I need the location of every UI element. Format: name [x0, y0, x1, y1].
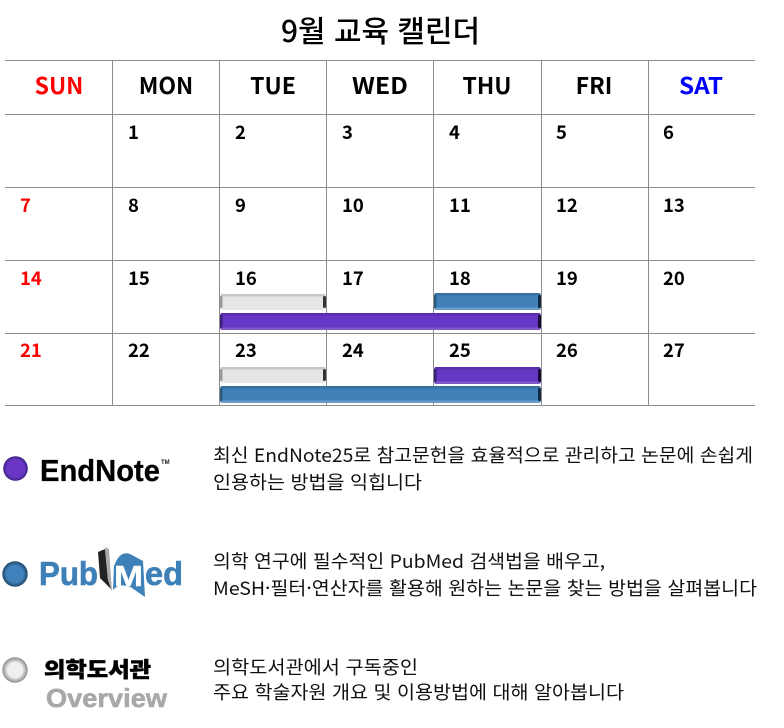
weekday header: TUE: [250, 67, 296, 101]
logo: library overview: 의학도서관: [44, 654, 151, 684]
date numbers: 7: [20, 192, 31, 218]
weekday header: WED: [352, 67, 408, 101]
date numbers: 13: [663, 192, 685, 218]
logo: PubMed: [39, 547, 183, 597]
date numbers: 24: [342, 337, 364, 363]
text: library description: 주요 학술자원 개요 및 이용방법에 대해 알아봅니다: [213, 679, 624, 705]
text: PubMed description: MeSH·필터·연산자를 활용해 원하는 논문을 찾는 방법을 살펴봅니다: [213, 575, 757, 601]
date numbers: 25: [449, 337, 471, 363]
date numbers: 16: [235, 265, 257, 291]
date numbers: 8: [128, 192, 139, 218]
logo: PubMed: Pub: [39, 555, 98, 592]
weekday header: FRI: [576, 67, 612, 101]
date numbers: 12: [556, 192, 578, 218]
logo: PubMed: M: [114, 561, 143, 593]
date numbers: 4: [449, 119, 460, 145]
weekday header: [35, 67, 723, 101]
logo: library overview: Overview: [46, 683, 168, 713]
date numbers: 9: [235, 192, 246, 218]
event bar: PubMed, week 4: [220, 386, 541, 403]
date numbers: 11: [449, 192, 471, 218]
date numbers: 18: [449, 265, 471, 291]
date numbers: 17: [342, 265, 364, 291]
date numbers: 26: [556, 337, 578, 363]
weekday header: SAT: [679, 67, 723, 101]
text: PubMed description: 의학 연구에 필수적인 PubMed 검색법을 배우고,: [213, 548, 605, 574]
date numbers: 1: [128, 119, 139, 145]
date numbers: 22: [128, 337, 150, 363]
icon: EndNote legend dot: [3, 456, 28, 481]
icon: library legend dot: [2, 657, 28, 683]
title: 9월 교육 캘린더: [281, 7, 480, 51]
weekday header: THU: [462, 67, 512, 101]
date numbers: 20: [663, 265, 685, 291]
date numbers: 6: [663, 119, 674, 145]
date numbers: [20, 119, 685, 363]
event bar: library overview, week 4: [220, 367, 326, 383]
date numbers: 23: [235, 337, 257, 363]
date numbers: 21: [20, 337, 42, 363]
date numbers: 27: [663, 337, 685, 363]
icon: PubMed legend dot: [2, 561, 28, 587]
weekday header: MON: [139, 67, 193, 101]
logo: EndNote: EndNote: [40, 453, 160, 488]
weekday header: SUN: [35, 67, 83, 101]
event bar: PubMed, week 3: [434, 293, 541, 310]
calendar grid: [5, 60, 755, 406]
text: EndNote description: 최신 EndNote25로 참고문헌을 효율적으로 관리하고 논문에 손쉽게: [213, 442, 753, 468]
event bar: EndNote, week 3: [220, 313, 541, 330]
logo: library overview: [44, 654, 168, 713]
text: library description: 의학도서관에서 구독중인: [213, 654, 418, 680]
date numbers: 2: [235, 119, 246, 145]
date numbers: 19: [556, 265, 578, 291]
logo: PubMed: ed: [145, 555, 183, 592]
logo: EndNote: TM: [161, 460, 170, 466]
event bar: EndNote, week 4: [434, 367, 541, 384]
date numbers: 14: [20, 265, 42, 291]
date numbers: 3: [342, 119, 353, 145]
text: EndNote description: 인용하는 방법을 익힙니다: [213, 469, 422, 495]
date numbers: 15: [128, 265, 150, 291]
date numbers: 10: [342, 192, 364, 218]
date numbers: 5: [556, 119, 567, 145]
event bar: library overview, week 3: [220, 294, 326, 310]
